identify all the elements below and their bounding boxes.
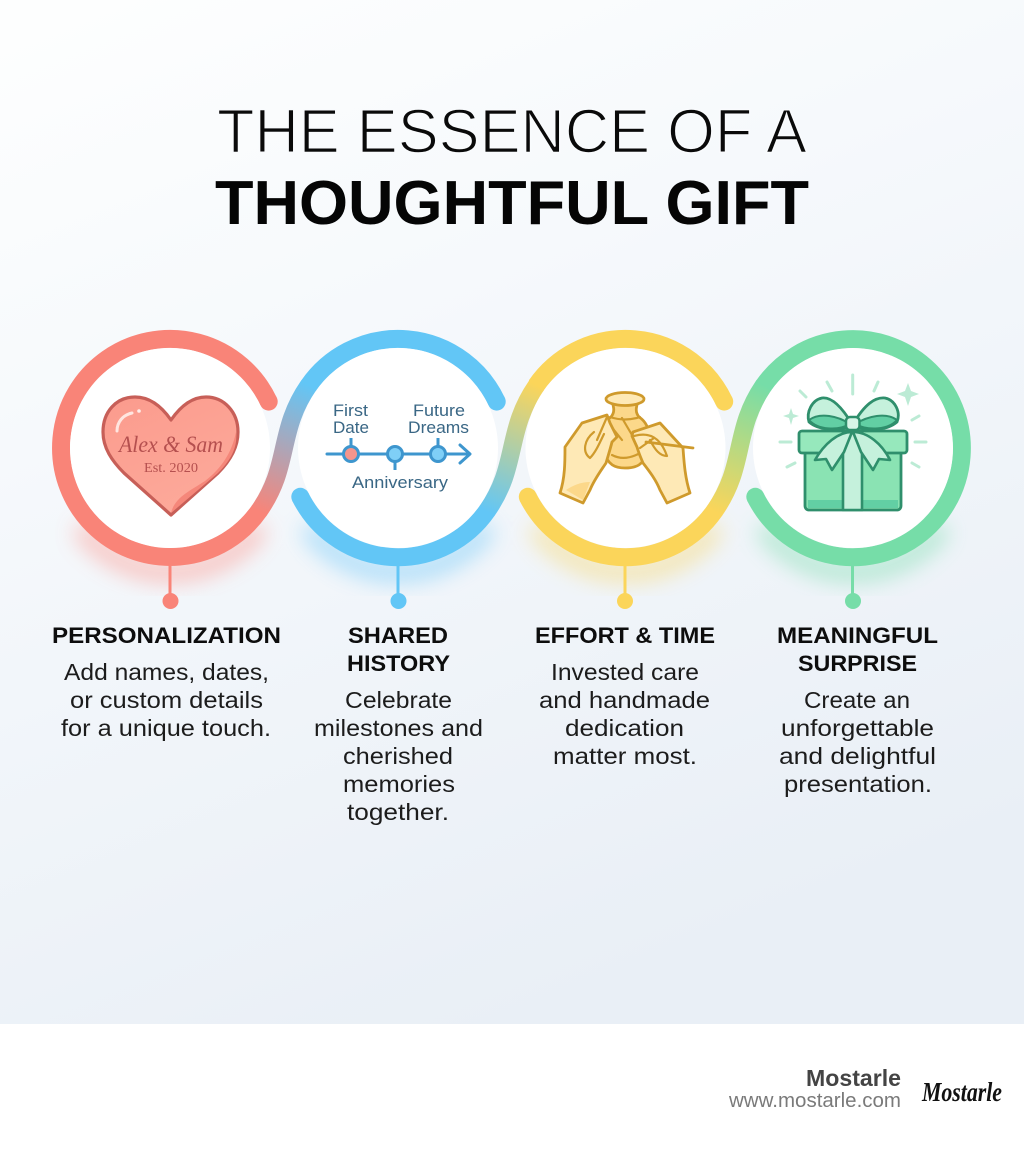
heading: SHARED	[348, 623, 448, 648]
website: www.mostarle.com	[728, 1090, 901, 1112]
icon: engraved heart: Alex & Sam	[117, 432, 223, 457]
title line 2: THOUGHTFUL GIFT	[215, 169, 809, 238]
heading: EFFORT & TIME	[535, 623, 715, 648]
description: memories	[343, 771, 455, 797]
description	[539, 659, 710, 769]
icon: timeline: Date	[333, 419, 369, 437]
description: Celebrate	[345, 687, 452, 713]
description: and delightful	[779, 743, 936, 769]
brand name: Mostarle	[806, 1065, 901, 1091]
description: or custom details	[70, 687, 263, 713]
icon: engraved heart	[103, 397, 238, 515]
panel: personalization	[52, 339, 309, 741]
connector stem and dot	[390, 566, 406, 609]
ring: red arc with connector to blue	[61, 339, 309, 557]
description: and handmade	[539, 687, 710, 713]
description: presentation.	[784, 771, 932, 797]
heading: HISTORY	[347, 651, 450, 676]
icon: timeline: Dreams	[408, 419, 469, 437]
description: Create an	[804, 687, 910, 713]
heading	[347, 623, 450, 676]
connector stem and dot	[617, 566, 633, 609]
description	[779, 687, 936, 797]
icon: timeline: First	[333, 402, 368, 420]
description: unforgettable	[781, 715, 934, 741]
ring: green arc	[746, 339, 962, 557]
white disc	[526, 348, 726, 548]
description: Invested care	[551, 659, 699, 685]
title line 1: THE ESSENCE OF A	[217, 98, 808, 166]
description: together.	[347, 799, 449, 825]
title	[215, 98, 809, 238]
footer	[0, 1024, 1024, 1154]
description: cherished	[343, 743, 453, 769]
heading	[777, 623, 938, 676]
icon: timeline: Anniversary	[352, 474, 449, 492]
panel: effort and time	[519, 339, 764, 769]
icon: hands shaping a vase	[560, 392, 693, 503]
description: Add names, dates,	[64, 659, 269, 685]
connector stem and dot	[845, 566, 861, 609]
white disc	[298, 348, 498, 548]
description: for a unique touch.	[61, 715, 271, 741]
description	[314, 687, 483, 825]
heading: MEANINGFUL	[777, 623, 938, 648]
panel: meaningful surprise	[746, 339, 962, 797]
icon: gift box with bow	[780, 375, 926, 510]
description: matter most.	[553, 743, 697, 769]
heading: SURPRISE	[798, 651, 917, 676]
description	[61, 659, 271, 741]
ring glows	[85, 533, 938, 572]
ring: yellow arcs with connector to green	[519, 339, 764, 557]
logo: Mostarle	[921, 1077, 1002, 1107]
icon: timeline	[327, 402, 470, 492]
description: dedication	[565, 715, 684, 741]
white disc	[70, 348, 270, 548]
icon: timeline: Future	[413, 402, 465, 420]
white disc	[753, 348, 953, 548]
description: milestones and	[314, 715, 483, 741]
ring: blue arcs with connector to yellow	[291, 339, 537, 557]
icon: engraved heart: Est. 2020	[144, 461, 198, 476]
heading: PERSONALIZATION	[52, 623, 281, 648]
panel: shared history	[291, 339, 537, 825]
connector stem and dot	[162, 566, 178, 609]
